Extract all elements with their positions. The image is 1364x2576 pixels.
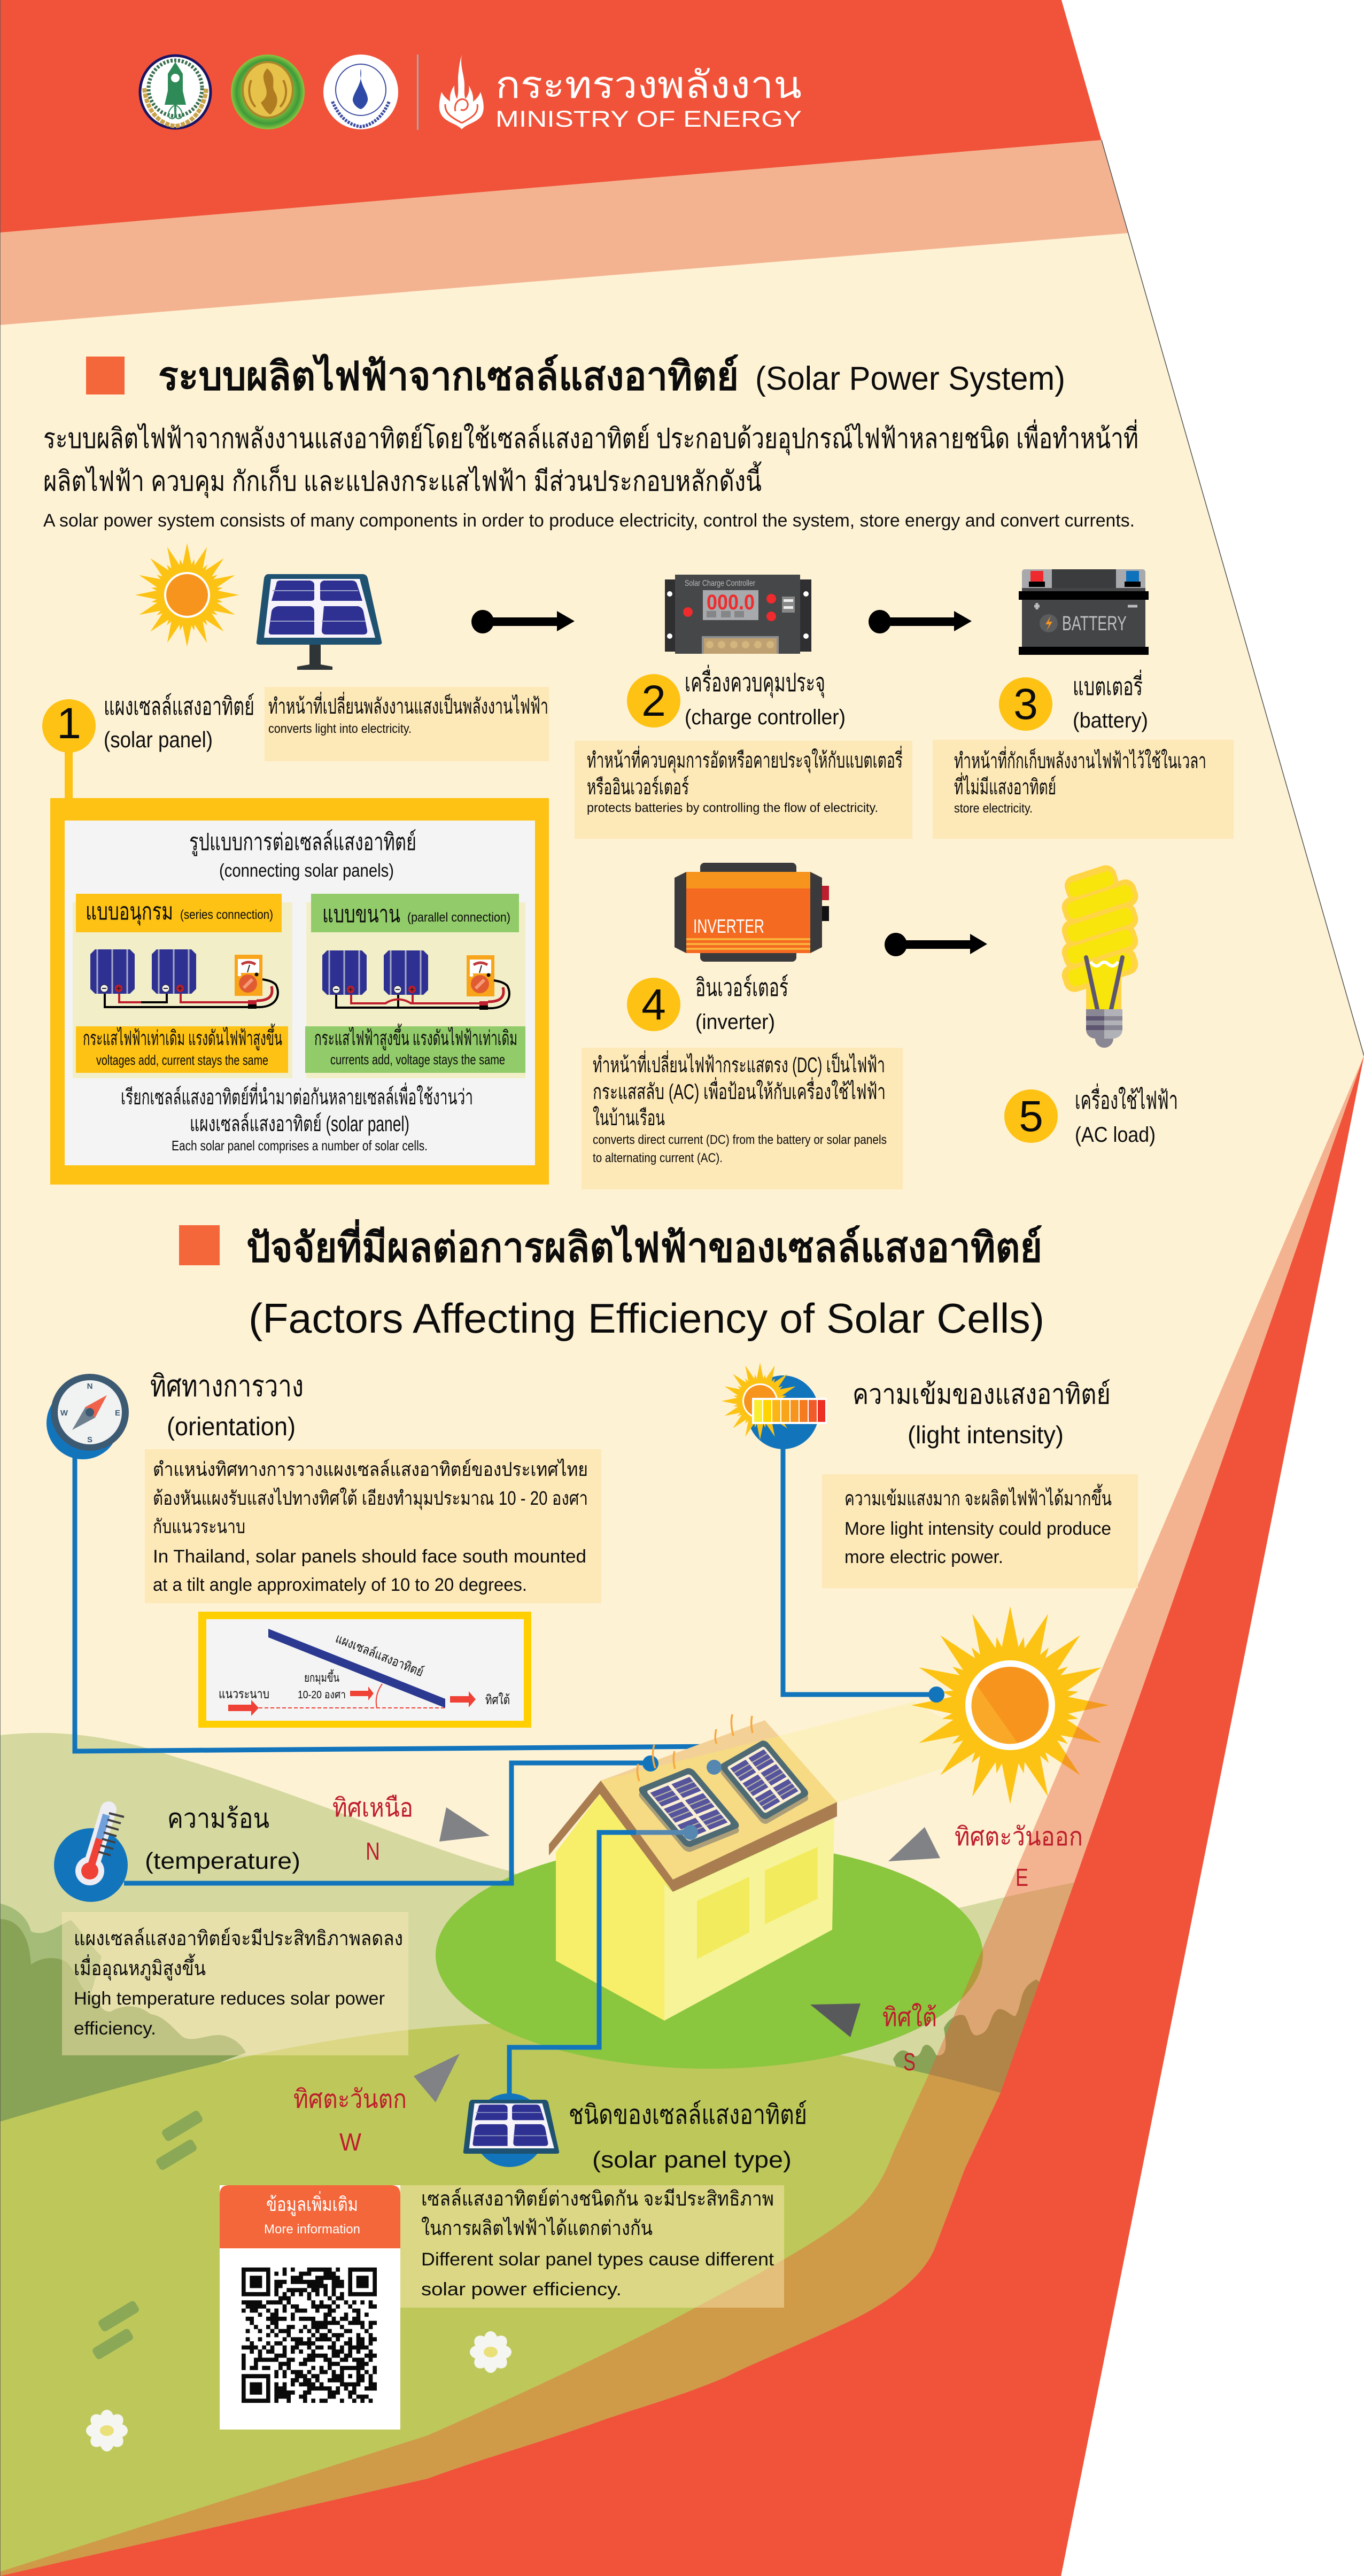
number 5: 5 (1019, 1092, 1043, 1141)
orientation heading: (orientation) (167, 1413, 296, 1441)
direction west: W (339, 2128, 362, 2156)
section heading: solar power system (86, 353, 1065, 398)
panel note: Each solar panel comprises a number of solar cells. (172, 1138, 428, 1154)
label: อินเวอร์เตอร์ (695, 973, 788, 1001)
description (582, 1048, 903, 1189)
intro text: ผลิตไฟฟ้า ควบคุม กักเก็บ และแปลงกระแสไฟฟ้า มีส่วนประกอบหลักดังนี้ (43, 461, 762, 498)
number 2 (627, 674, 680, 728)
heading (189, 829, 416, 881)
direction triangles (414, 1807, 940, 2102)
description: ในบ้านเรือน (593, 1105, 665, 1130)
icon: inverter (675, 863, 829, 962)
icon: compass (46, 1374, 129, 1459)
series connection: แบบอนุกรม (86, 899, 173, 926)
description: protects batteries by controlling the flow of electricity. (587, 801, 878, 815)
logo: office seal (140, 56, 211, 128)
solar panel type text: solar power efficiency. (421, 2279, 622, 2300)
label: (battery) (1073, 709, 1148, 732)
temperature text: เมื่ออุณหภูมิสูงขึ้น (74, 1953, 206, 1981)
icon: compass: N (87, 1382, 92, 1391)
parallel connection: (parallel connection) (407, 910, 510, 925)
label: (solar panel) (104, 727, 213, 752)
icon: charge controller: 000.0 (707, 591, 755, 614)
icon: compass: W (60, 1409, 68, 1418)
light intensity heading: (light intensity) (908, 1421, 1064, 1449)
label: (charge controller) (685, 706, 846, 729)
number 5 (1004, 1089, 1058, 1143)
description: store electricity. (954, 801, 1033, 816)
tilt diagram: แนวระนาบ (219, 1687, 269, 1701)
number 1 (42, 699, 96, 799)
description (575, 741, 912, 839)
section heading: solar power system: (Solar Power System) (755, 360, 1065, 397)
description: ทำหน้าที่ควบคุมการอัดหรือคายประจุให้กับแบตเตอรี่ (587, 746, 903, 773)
arrow: inverter to load (885, 933, 987, 956)
solar panel type text: ในการผลิตไฟฟ้าได้แตกต่างกัน (421, 2217, 653, 2240)
item 5: AC load (1004, 1083, 1178, 1147)
item 4: inverter (582, 973, 903, 1189)
arrow: controller to battery (869, 610, 972, 633)
direction south: ทิศใต้ (882, 2002, 937, 2032)
description: หรืออินเวอร์เตอร์ (587, 775, 689, 799)
diagram: parallel wiring (322, 950, 509, 1010)
icon: battery (1019, 569, 1149, 655)
number 4 (627, 978, 680, 1031)
number 3 (999, 677, 1052, 731)
icon: small sun (135, 543, 239, 647)
light intensity text: ความเข้มแสงมาก จะผลิตไฟฟ้าได้มากขึ้น (844, 1483, 1112, 1510)
label (1075, 1083, 1178, 1147)
label: เครื่องควบคุมประจุ (685, 664, 825, 698)
parallel connection: currents add, voltage stays the same (330, 1051, 505, 1067)
description (933, 740, 1234, 839)
orientation text (145, 1449, 601, 1603)
label: (AC load) (1075, 1123, 1156, 1147)
diagram: series wiring (90, 949, 278, 1009)
label: เครื่องใช้ไฟฟ้า (1075, 1083, 1178, 1114)
icon: light bulb (1059, 862, 1141, 1048)
direction east (955, 1823, 1083, 1891)
label (104, 692, 254, 752)
light intensity text: more electric power. (844, 1547, 1003, 1567)
description: กระแสสลับ (AC) เพื่อป้อนให้กับเครื่องใช้ไฟฟ้า (593, 1077, 886, 1104)
series connection: voltages add, current stays the same (96, 1052, 268, 1068)
direction north: ทิศเหนือ (332, 1794, 413, 1822)
more information QR card (220, 2185, 400, 2430)
orientation text: กับแนวระนาบ (153, 1515, 245, 1537)
light intensity heading (852, 1379, 1111, 1449)
light intensity text (822, 1474, 1138, 1588)
connector line: panel type (509, 1832, 636, 2098)
tilt diagram: ยกมุมขึ้น (304, 1669, 339, 1685)
light intensity heading: ความเข้มของแสงอาทิตย์ (852, 1379, 1111, 1410)
solar panel type heading: ชนิดของเซลล์แสงอาทิตย์ (569, 2100, 807, 2130)
wall right (664, 1818, 834, 2021)
intro text: ระบบผลิตไฟฟ้าจากพลังงานแสงอาทิตย์โดยใช้เซลล์แสงอาทิตย์ ประกอบด้วยอุปกรณ์ไฟฟ้าหลายชนิด เพื่อทำหน้าที่ (43, 419, 1138, 455)
roof solar panels (637, 1739, 810, 1853)
direction north (332, 1794, 413, 1865)
solar panel type heading (569, 2100, 807, 2173)
windows (697, 1847, 818, 1959)
orientation text: at a tilt angle approximately of 10 to 20 degrees. (153, 1575, 527, 1595)
direction east: E (1016, 1863, 1028, 1891)
label (1073, 669, 1148, 732)
ministry name: MINISTRY OF ENERGY (495, 106, 802, 132)
parallel connection: กระแสไฟฟ้าสูงขึ้น แรงดันไฟฟ้าเท่าเดิม (314, 1023, 517, 1050)
connector line: orientation (75, 1457, 717, 1767)
connector line: temperature (124, 1763, 650, 1883)
wall left (556, 1794, 673, 2021)
temperature heading: ความร้อน (167, 1804, 269, 1834)
item 1: solar panel (42, 687, 549, 799)
temperature text: แผงเซลล์แสงอาทิตย์จะมีประสิทธิภาพลดลง (74, 1927, 403, 1950)
icon: solar panel type (463, 2093, 559, 2167)
description: to alternating current (AC). (593, 1151, 723, 1165)
section heading: factors affecting efficiency (179, 1219, 1044, 1342)
sun connector dot (928, 1687, 944, 1703)
panel: connecting solar panels (50, 798, 549, 1185)
panel note: เรียกเซลล์แสงอาทิตย์ที่นำมาต่อกันหลายเซลล์เพื่อใช้งานว่า (121, 1082, 473, 1109)
ministry name (495, 64, 802, 132)
description: ทำหน้าที่เปลี่ยนไฟฟ้ากระแสตรง (DC) เป็นไฟฟ้า (593, 1050, 885, 1077)
house (549, 1720, 837, 2021)
QR code (242, 2270, 377, 2401)
direction south (882, 2002, 937, 2076)
icon: ministry flame (439, 55, 484, 129)
temperature text (62, 1912, 408, 2055)
flowers (86, 2331, 511, 2451)
series connection (73, 894, 292, 1078)
direction west: ทิศตะวันตก (293, 2085, 407, 2114)
parallel connection: แบบขนาน (322, 901, 400, 927)
number 1: 1 (57, 699, 81, 748)
description: converts light into electricity. (268, 722, 412, 736)
series connection: (series connection) (180, 908, 273, 922)
icon: charge controller (665, 575, 811, 654)
orientation text: ต้องหันแผงรับแสงไปทางทิศใต้ เอียงทำมุมประมาณ 10 - 20 องศา (153, 1487, 588, 1510)
orientation text: In Thailand, solar panels should face south mounted (153, 1546, 586, 1567)
label (685, 664, 846, 729)
description: converts direct current (DC) from the battery or solar panels (593, 1133, 887, 1147)
sunbeam on roof (601, 1736, 837, 1879)
ministry name: กระทรวงพลังงาน (495, 64, 802, 106)
heading: (connecting solar panels) (219, 861, 394, 881)
intro text (43, 419, 1138, 531)
tilt diagram: 10-20 องศา (298, 1689, 346, 1701)
series connection: กระแสไฟฟ้าเท่าเดิม แรงดันไฟฟ้าสูงขึ้น (83, 1023, 282, 1050)
orientation text: ตำแหน่งทิศทางการวางแผงเซลล์แสงอาทิตย์ของประเทศไทย (153, 1458, 588, 1480)
direction south: S (903, 2048, 916, 2076)
icon: compass: S (87, 1435, 92, 1444)
solar panel type text (400, 2185, 784, 2308)
header logos (140, 55, 802, 132)
panel note (121, 1082, 473, 1154)
label: (inverter) (695, 1010, 775, 1034)
section heading: factors affecting efficiency: ปัจจัยที่มีผลต่อการผลิตไฟฟ้าของเซลล์แสงอาทิตย์ (246, 1219, 1042, 1271)
icon: battery: BATTERY (1062, 613, 1127, 635)
number 4: 4 (641, 980, 666, 1029)
icon: compass: E (115, 1409, 120, 1418)
heading: รูปแบบการต่อเซลล์แสงอาทิตย์ (189, 829, 416, 856)
intro text: A solar power system consists of many components in order to produce electricity, control the system, store energy and convert currents. (43, 510, 1135, 531)
light intensity text: More light intensity could produce (844, 1519, 1111, 1539)
logo: university seal (231, 55, 305, 129)
tilt diagram: แผงเซลล์แสงอาทิตย์ (334, 1631, 425, 1680)
icon: thermometer (54, 1809, 128, 1902)
number 2: 2 (641, 677, 666, 725)
description (265, 687, 549, 761)
card heading (264, 2191, 360, 2237)
icon: light intensity (722, 1363, 827, 1449)
parallel connection (305, 894, 525, 1078)
logo: energy fund (323, 55, 398, 129)
arrow: panel to controller (471, 610, 575, 633)
solar panel type text: เซลล์แสงอาทิตย์ต่างชนิดกัน จะมีประสิทธิภาพ (421, 2187, 774, 2210)
roof (549, 1781, 837, 1892)
orientation heading (150, 1369, 304, 1441)
icon: charge controller: Solar Charge Controller (685, 579, 756, 588)
description: ทำหน้าที่กักเก็บพลังงานไฟฟ้าไว้ใช้ในเวลา (954, 746, 1206, 773)
divider (417, 55, 418, 130)
tilt diagram: ทิศใต้ (485, 1692, 510, 1707)
section heading: factors affecting efficiency: (Factors Affecting Efficiency of Solar Cells) (249, 1295, 1044, 1342)
description: ที่ไม่มีแสงอาทิตย์ (954, 772, 1056, 799)
direction east: ทิศตะวันออก (955, 1823, 1083, 1851)
direction west (293, 2085, 407, 2156)
solar panel type text: Different solar panel types cause different (421, 2249, 774, 2270)
label (695, 973, 788, 1034)
direction north: N (366, 1837, 380, 1865)
temperature heading: (temperature) (145, 1848, 300, 1874)
item 3: battery (933, 669, 1234, 839)
section heading: solar power system: ระบบผลิตไฟฟ้าจากเซลล์แสงอาทิตย์ (158, 353, 739, 398)
icon: inverter: INVERTER (693, 915, 764, 937)
connector dots and heat wisps (637, 1714, 753, 1840)
tilt diagram (198, 1612, 531, 1728)
number 3: 3 (1013, 680, 1038, 729)
icon: solar panel on stand (257, 574, 382, 670)
temperature heading (145, 1804, 300, 1874)
solar panel type heading: (solar panel type) (592, 2147, 792, 2173)
temperature text: High temperature reduces solar power (74, 1989, 385, 2009)
label: แบตเตอรี่ (1073, 669, 1143, 700)
card heading: More information (264, 2222, 360, 2237)
grass marks (91, 2109, 204, 2361)
connector line: light intensity (783, 1446, 936, 1695)
orientation heading: ทิศทางการวาง (150, 1369, 304, 1403)
card heading: ข้อมูลเพิ่มเติม (266, 2191, 358, 2216)
panel note: แผงเซลล์แสงอาทิตย์ (solar panel) (190, 1112, 409, 1136)
description: ทำหน้าที่เปลี่ยนพลังงานแสงเป็นพลังงานไฟฟ้า (268, 692, 548, 718)
item 2: charge controller (575, 664, 912, 839)
label: แผงเซลล์แสงอาทิตย์ (104, 692, 254, 720)
temperature text: efficiency. (74, 2018, 156, 2039)
